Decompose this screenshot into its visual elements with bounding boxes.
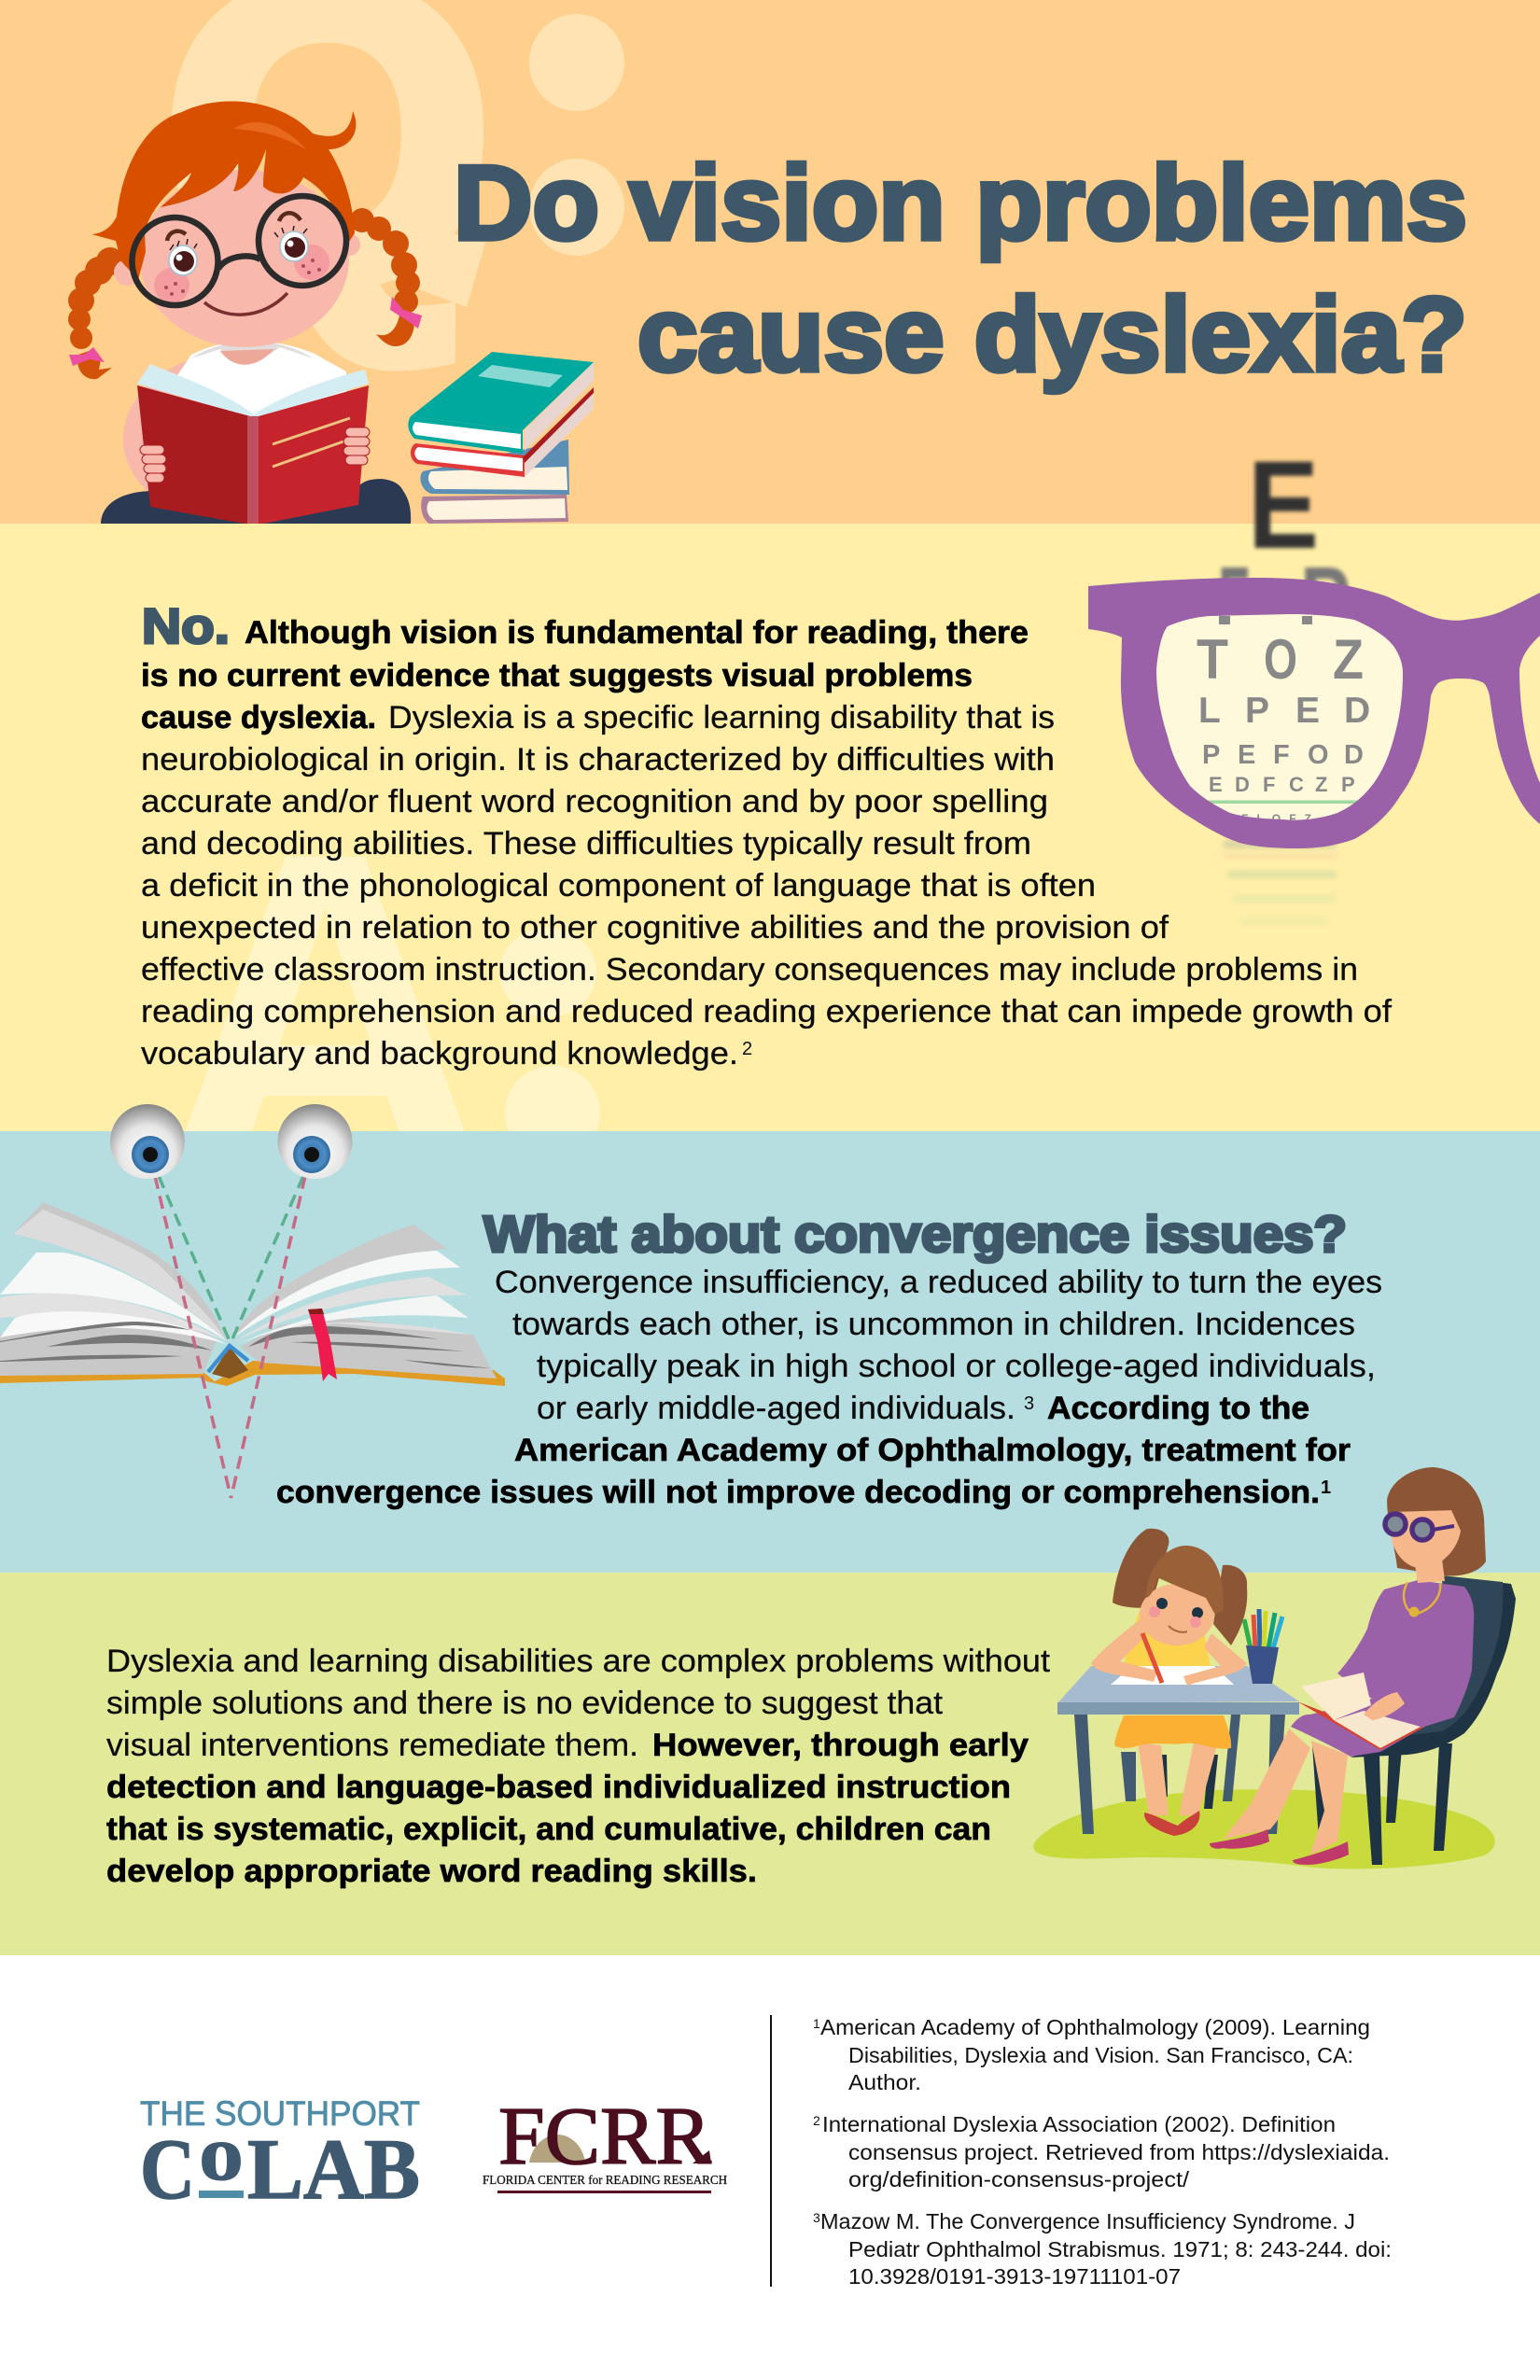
eye chart: sharp letters inside the lens: O: [1264, 628, 1297, 691]
reference 2: [813, 2112, 1390, 2191]
eye chart: blurred letters outside the lens: [1218, 436, 1351, 924]
reference 3: 3: [813, 2210, 820, 2225]
eye chart: sharp letters inside the lens: D: [1344, 740, 1364, 770]
book: teal top: [408, 352, 594, 454]
icon: left eyeball: [110, 1104, 185, 1179]
book: red: [411, 387, 594, 477]
panel: convergence section background: [0, 1131, 1540, 1573]
girl: cheeks: [154, 245, 329, 303]
girl: smile: [204, 293, 287, 315]
heading: what about convergence issues: What about convergence issues?: [483, 1205, 1347, 1263]
text block: answer paragraph: Although vision is fundamental for reading, there: [245, 615, 1029, 651]
reference 3: Mazow M. The Convergence Insufficiency Syndrome. J: [820, 2209, 1355, 2233]
girl: freckles: [164, 259, 321, 296]
eye chart: blurred letters outside the lens: P: [1300, 545, 1351, 658]
text block: convergence paragraph: American Academy of Ophthalmology, treatment for: [514, 1433, 1351, 1468]
text block: conclusion paragraph: visual interventions remediate them.: [106, 1728, 638, 1763]
text block: convergence paragraph: [276, 1265, 1382, 1510]
text block: answer paragraph: accurate and/or fluent word recognition and by poor spelling: [141, 784, 1048, 819]
eye chart: sharp letters inside the lens: P: [1245, 691, 1269, 731]
reference 3: Pediatr Ophthalmol Strabismus. 1971; 8: 243-244. doi:: [848, 2237, 1392, 2261]
child: chair and desk back legs: [1121, 1715, 1240, 1809]
eye chart: sharp letters inside the lens: O: [1308, 740, 1329, 770]
teacher: chair: [1312, 1575, 1516, 1865]
teacher: hair: [1387, 1467, 1486, 1575]
title: Do vision problems: [454, 145, 1467, 261]
text block: answer paragraph: [141, 599, 1393, 1071]
girl: left braid: [68, 247, 124, 379]
logo: The Southport CoLab: THE SOUTHPORT: [140, 2094, 420, 2133]
text block: answer paragraph: 2: [742, 1039, 752, 1059]
text block: answer paragraph: Dyslexia is a specific learning disability that is: [388, 700, 1055, 735]
desk: top and edge: [1057, 1666, 1299, 1715]
divider line: [770, 2015, 772, 2287]
book: bookmark ribbon: [308, 1309, 337, 1381]
eye chart: sharp letters inside the lens: D: [1235, 773, 1250, 796]
reference 1: 1: [813, 2016, 820, 2031]
reference 2: International Dyslexia Association (2002). Definition: [822, 2112, 1336, 2136]
eye chart: sharp letters inside the lens: L: [1198, 691, 1221, 731]
text block: convergence paragraph: or early middle-aged individuals.: [537, 1391, 1015, 1426]
glasses: purple frame: [1088, 578, 1540, 848]
text block: convergence paragraph: convergence issues will not improve decoding or comprehension.: [276, 1475, 1320, 1510]
scene: green ground blob: [1033, 1789, 1495, 1869]
text block: convergence paragraph: typically peak in high school or college-aged individuals,: [537, 1349, 1376, 1384]
girl: round glasses: [133, 196, 346, 305]
text block: answer paragraph: vocabulary and background knowledge.: [141, 1036, 738, 1071]
teacher: neck, face and glasses: [1385, 1498, 1461, 1583]
eye chart: sharp letters inside the lens: Z: [1315, 773, 1327, 796]
logo: The Southport CoLab: LAB: [247, 2121, 420, 2217]
logo: Florida Center for Reading Research: FCRR: [498, 2092, 711, 2182]
text block: answer paragraph: cause dyslexia.: [141, 700, 376, 735]
eye chart: sharp letters inside the lens: P: [1341, 773, 1355, 796]
eye chart: blurred letters outside the lens: E: [1248, 436, 1319, 575]
teacher: open book on lap: [1297, 1673, 1425, 1750]
glasses: right lens: [1519, 636, 1540, 783]
teacher: purple dress: [1291, 1580, 1474, 1757]
text block: conclusion paragraph: detection and language-based individualized instruction: [106, 1770, 1011, 1805]
text block: convergence paragraph: 1: [1321, 1477, 1331, 1498]
panel: conclusion section background: [0, 1573, 1540, 1955]
eye chart: sharp letters inside the lens: Z: [1333, 628, 1364, 691]
dashed sight lines: [155, 1176, 305, 1498]
eye chart: sharp letters inside the lens: E: [1238, 740, 1255, 770]
girl: hands on the book: [140, 427, 370, 483]
teacher: hand on book: [1364, 1692, 1405, 1720]
girl: shoulders and collar: [123, 341, 366, 527]
text block: answer paragraph: unexpected in relation to other cognitive abilities and the provision of: [141, 910, 1169, 945]
eye chart: sharp letters inside the lens: E: [1209, 773, 1223, 796]
text block: answer paragraph: is no current evidence that suggests visual problems: [141, 658, 973, 693]
logo: The Southport CoLab: C: [140, 2121, 195, 2217]
text block: conclusion paragraph: simple solutions and there is no evidence to suggest that: [106, 1686, 944, 1721]
logo: The Southport CoLab: o: [199, 2110, 244, 2197]
child: orange skirt: [1114, 1715, 1231, 1749]
text block: conclusion paragraph: Dyslexia and learning disabilities are complex problems without: [106, 1644, 1051, 1679]
text block: answer paragraph: a deficit in the phonological component of language that is often: [141, 868, 1096, 903]
illustration: teacher and child at a desk: [1033, 1467, 1516, 1869]
reference 1: Disabilities, Dyslexia and Vision. San Francisco, CA:: [848, 2043, 1353, 2067]
reference 1: Author.: [848, 2070, 921, 2094]
icon: right eyeball: [278, 1104, 353, 1179]
girl: hair: [91, 101, 356, 280]
text block: convergence paragraph: 3: [1024, 1393, 1034, 1414]
glasses: lens: [1156, 614, 1403, 820]
text block: answer paragraph: neurobiological in origin. It is characterized by difficulties with: [141, 742, 1055, 777]
text block: convergence paragraph: According to the: [1047, 1391, 1309, 1426]
text block: conclusion paragraph: develop appropriate word reading skills.: [106, 1854, 757, 1889]
desk: pencil cup: [1244, 1609, 1282, 1684]
illustration: open book with converging eye lines: [0, 1104, 505, 1498]
eye chart: sharp letters inside the lens: E: [1295, 691, 1320, 731]
girl: dark trousers: [101, 479, 411, 525]
child: head and face: [1140, 1546, 1224, 1645]
girl: eyes: [167, 213, 308, 275]
text block: answer paragraph: and decoding abilities. These difficulties typically result from: [141, 826, 1031, 861]
girl: braid ribbons: [69, 297, 422, 366]
watermark: letter A with colon: A: [157, 755, 494, 1277]
reference 1: American Academy of Ophthalmology (2009). Learning: [820, 2015, 1370, 2039]
child: ponytails: [1113, 1529, 1247, 1645]
reference 1: [813, 2015, 1370, 2094]
eye chart: sharp letters inside the lens: D: [1344, 691, 1370, 731]
book: spine: [208, 1346, 248, 1379]
girl: right braid: [350, 208, 420, 346]
panel: answer section background: [0, 524, 1540, 1131]
illustration: stack of books: [408, 352, 594, 524]
reference 2: 2: [813, 2113, 820, 2128]
child: legs and shoes: [1138, 1743, 1217, 1836]
eye chart: sharp letters inside the lens: [1197, 616, 1370, 825]
text block: convergence paragraph: towards each other, is uncommon in children. Incidences: [512, 1307, 1355, 1342]
eye chart: sharp letters inside the lens: F L O F Z: [1241, 812, 1311, 825]
panel: footer background: [0, 1955, 1540, 2380]
text block: conclusion paragraph: that is systematic, explicit, and cumulative, children can: [106, 1812, 991, 1847]
text block: conclusion paragraph: [106, 1644, 1051, 1889]
text block: references: [813, 2015, 1392, 2289]
eye chart: sharp letters inside the lens: F: [1263, 773, 1275, 796]
eye chart: sharp letters inside the lens: T: [1197, 628, 1228, 691]
book: red cover: [137, 385, 369, 525]
eye chart: sharp letters inside the lens: F: [1273, 740, 1290, 770]
title: [454, 145, 1467, 393]
child: yellow top: [1125, 1613, 1211, 1666]
child: arms and paper: [1091, 1619, 1247, 1686]
reference 3: [813, 2209, 1392, 2289]
text block: convergence paragraph: Convergence insufficiency, a reduced ability to turn the eyes: [495, 1265, 1382, 1300]
teacher: legs and shoes: [1210, 1729, 1349, 1865]
book: left pages: [0, 1202, 227, 1376]
title: cause dyslexia?: [637, 276, 1467, 393]
reference 3: 10.3928/0191-3913-19711101-07: [848, 2264, 1181, 2289]
text block: answer paragraph: effective classroom instruction. Secondary consequences may include problems in: [141, 952, 1358, 987]
answer heading word: No.: [142, 599, 230, 654]
book: right pages: [233, 1225, 497, 1379]
reference 2: org/definition-consensus-project/: [848, 2167, 1190, 2191]
text block: conclusion paragraph: However, through early: [652, 1728, 1029, 1763]
illustration: girl with glasses reading a red book: [68, 101, 422, 527]
text block: answer paragraph: reading comprehension and reduced reading experience that can impede growth of: [141, 994, 1393, 1029]
eye chart: blurred letters outside the lens: F: [1218, 545, 1250, 658]
book: bottom mauve: [421, 495, 568, 524]
logo: The Southport CoLab: [140, 2094, 420, 2217]
book: open pages: [137, 364, 369, 417]
logo: Florida Center for Reading Research: FLORIDA CENTER for READING RESEARCH: [483, 2174, 727, 2188]
eye chart: sharp letters inside the lens: C: [1289, 773, 1304, 796]
reference 2: consensus project. Retrieved from https://dyslexiaida.: [848, 2140, 1390, 2164]
eye chart: sharp letters inside the lens: P: [1202, 740, 1220, 770]
panel: question header background: [0, 0, 1540, 525]
girl: head: [114, 170, 360, 347]
book: orange cover and spine: [0, 1361, 505, 1386]
book: blue: [420, 440, 569, 495]
teacher: necklace: [1404, 1582, 1440, 1617]
desk: front legs: [1074, 1715, 1285, 1834]
illustration: eye chart seen through glasses: [1088, 436, 1540, 924]
